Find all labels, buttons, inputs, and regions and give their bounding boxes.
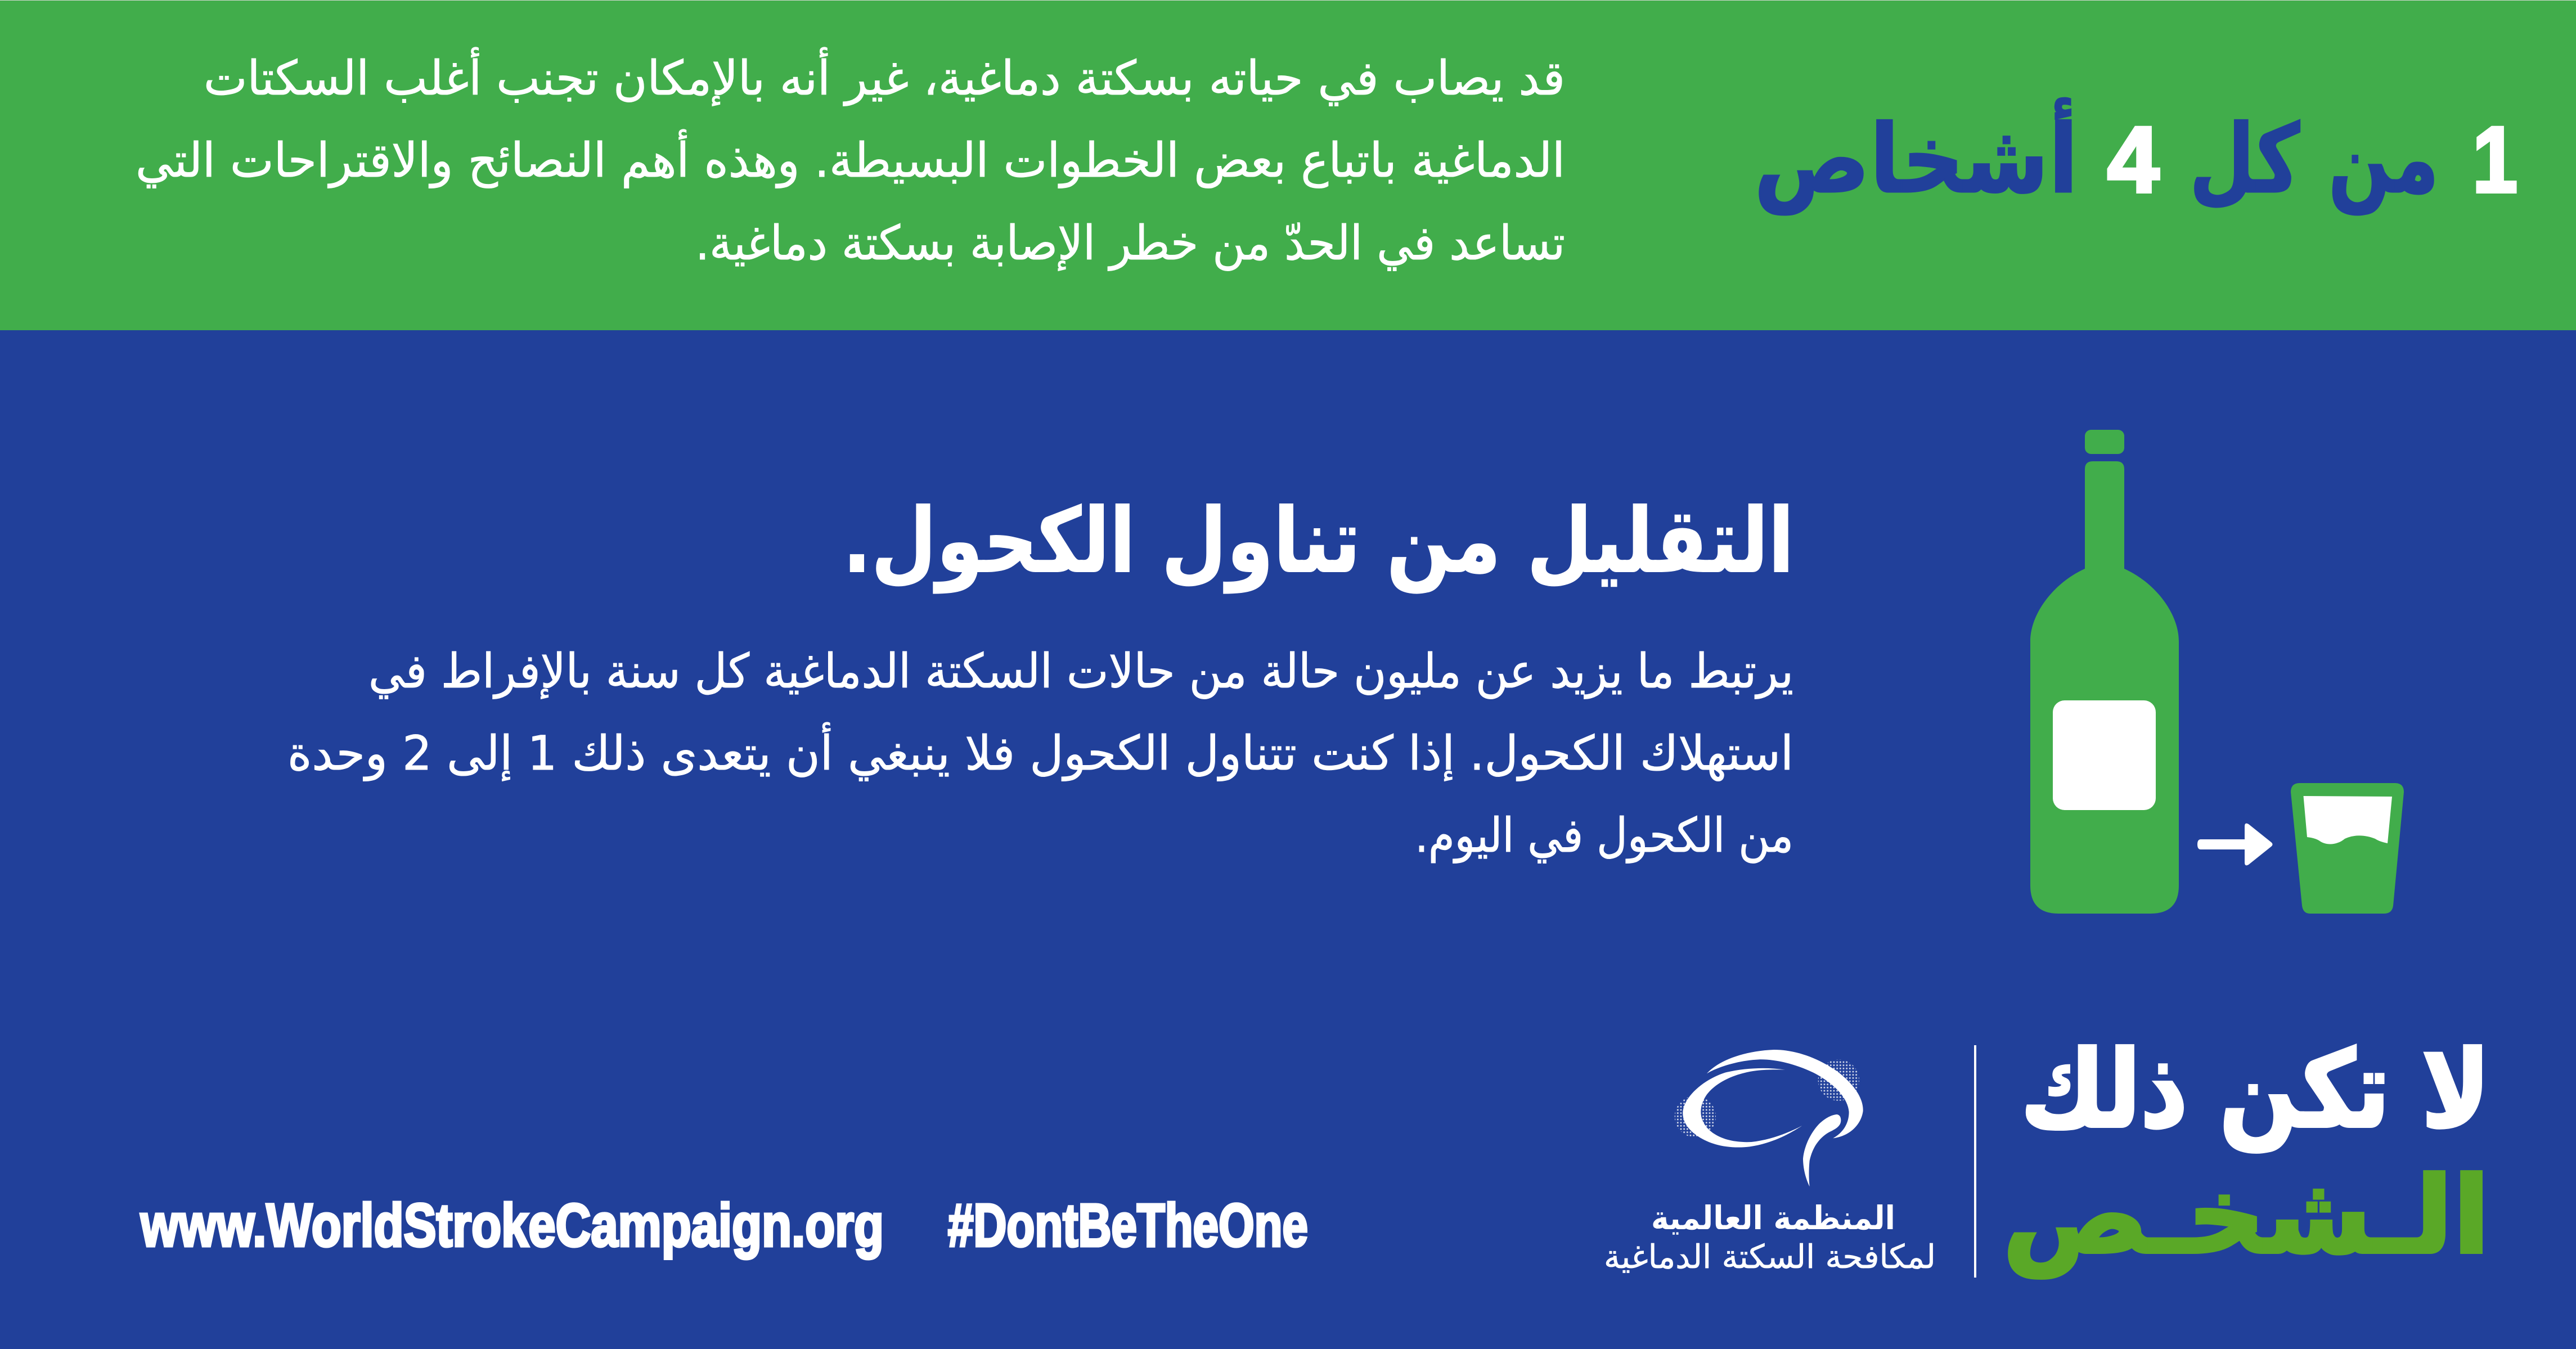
logo: organisation name: لمكافحة السكتة الدماغية	[1604, 1238, 1936, 1276]
body text block: استهلاك الكحول. إذا كنت تتناول الكحول فلا ينبغي أن يتعدى ذلك 1 إلى 2 وحدة	[287, 722, 1793, 781]
icon: bottle	[2030, 430, 2179, 914]
heading: 1 in 4 people: من	[2328, 104, 2439, 215]
slogan: don't be that: لا تكن ذلك	[2021, 1028, 2490, 1152]
heading: 1 in 4 people: 4	[2107, 108, 2159, 212]
logo: organisation name: المنظمة العالمية	[1651, 1199, 1895, 1237]
section heading: reduce alcohol: التقليل من تناول الكحول.	[843, 489, 1794, 593]
slogan: person: الـشخـص	[2003, 1154, 2490, 1278]
heading: 1 in 4 people: 1	[2472, 108, 2517, 212]
intro text block: تساعد في الحدّ من خطر الإصابة بسكتة دماغية.	[695, 215, 1565, 271]
icon: arrow	[2197, 824, 2273, 865]
website url: www.WorldStrokeCampaign.org	[140, 1191, 884, 1259]
heading: 1 in 4 people	[1754, 97, 2517, 215]
intro text block: قد يصاب في حياته بسكتة دماغية، غير أنه بالإمكان تجنب أغلب السكتات	[204, 47, 1565, 106]
intro text block	[136, 47, 1565, 271]
logo: brain mark	[1675, 1050, 1863, 1186]
hashtag: #DontBeTheOne	[948, 1191, 1308, 1259]
body text block: من الكحول في اليوم.	[1415, 808, 1793, 864]
body text block: يرتبط ما يزيد عن مليون حالة من حالات السكتة الدماغية كل سنة بالإفراط في	[368, 644, 1793, 699]
panel: green top band	[0, 0, 2576, 330]
logo: organisation name	[1604, 1199, 1936, 1276]
icon: glass	[2291, 783, 2404, 914]
body text block	[287, 644, 1793, 864]
heading: 1 in 4 people: كل	[2190, 104, 2300, 214]
divider	[1974, 1045, 1976, 1278]
intro text block: الدماغية باتباع بعض الخطوات البسيطة. وهذه أهم النصائح والاقتراحات التي	[136, 129, 1565, 188]
heading: 1 in 4 people: أشخاص	[1754, 97, 2078, 215]
